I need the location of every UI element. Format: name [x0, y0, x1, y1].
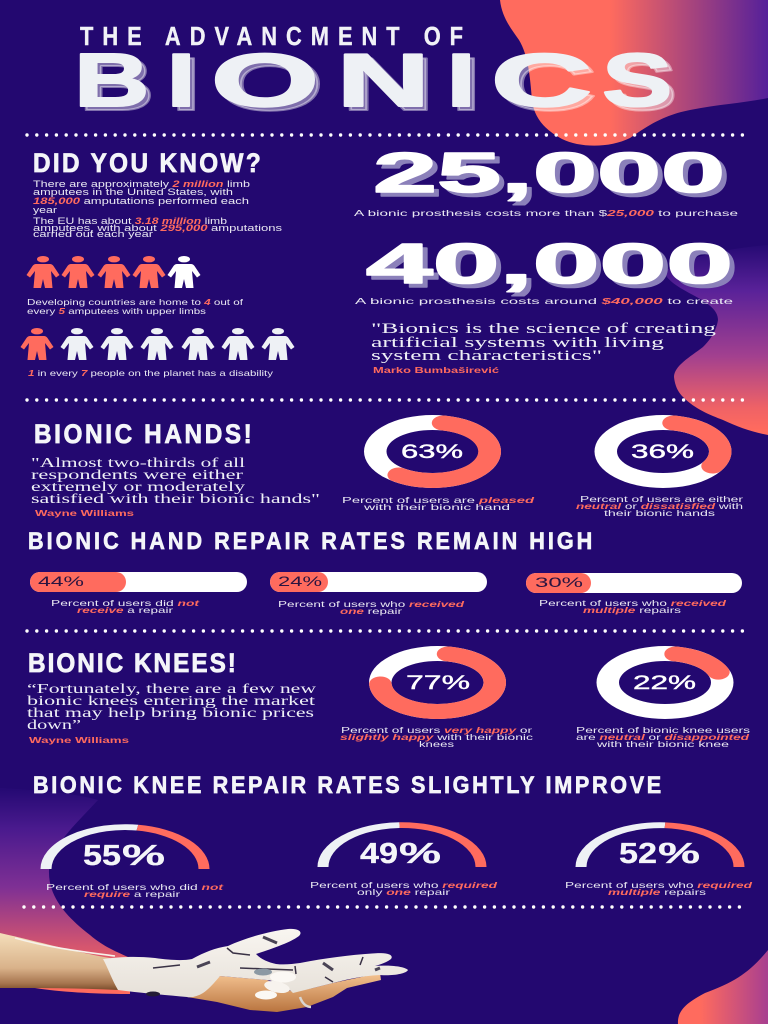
- heading: knee repair rates: BIONIC KNEE REPAIR RATES SLIGHTLY IMPROVE: [33, 771, 661, 798]
- caption: pleased: Percent of users are pleased: [342, 495, 536, 505]
- background blob: bottom right: [678, 950, 768, 1024]
- quote: wayne williams on knees: bionic knees entering the market: [27, 694, 315, 709]
- panel: did you know: [20, 149, 294, 378]
- gauge: 52%: %: [658, 838, 700, 870]
- text block: amputee statistics: amputees, with about 295,000 amputations: [33, 223, 283, 233]
- background blob: bottom left: [0, 788, 130, 994]
- text block: amputee statistics: amputees in the United States, with: [33, 187, 233, 197]
- donut chart: 77%: [369, 646, 506, 719]
- title: bionics: I: [172, 42, 201, 126]
- title: bionics: B: [79, 42, 154, 126]
- gauge: 52%: [581, 825, 739, 870]
- caption: neutral or dissatisfied: Percent of users are either: [580, 494, 743, 504]
- title: bionics: C: [496, 42, 597, 126]
- icons: 1 of 7 people: [20, 328, 294, 360]
- caption: cost to purchase: A bionic prosthesis costs more than $ 25,000 to purchase: [354, 208, 739, 218]
- caption: very happy: Percent of users very happy or: [341, 725, 532, 735]
- donut chart: 63%: 63%: [401, 442, 463, 463]
- gauge: 49%: [323, 825, 481, 870]
- caption: disability: 1 in every 7 people on the planet has a disability: [28, 368, 274, 378]
- quote: wayne williams on knees: down”: [27, 718, 81, 733]
- caption: one repair required: [310, 880, 499, 897]
- title: bionics: [74, 38, 677, 126]
- caption: neutral or dissatisfied: [576, 494, 744, 518]
- panel: hand repair rates: [28, 527, 742, 616]
- stat: 25,000: 25,000: [378, 145, 730, 209]
- background blob: top right: [500, 0, 768, 146]
- gauge: 52%: 52: [619, 838, 657, 870]
- title: bionics: C: [491, 38, 592, 122]
- caption: neutral or disappointed: [576, 725, 751, 749]
- quote: wayne williams on knees: “Fortunately, there are a few new: [27, 682, 317, 697]
- quote: wayne williams on knees: Wayne Williams: [29, 735, 130, 745]
- title: bionics: S: [607, 42, 677, 126]
- heading: did you know: DID YOU KNOW?: [33, 149, 261, 178]
- caption: neutral or disappointed: Percent of bionic knee users: [576, 725, 750, 735]
- gauge: 55%: [46, 827, 204, 872]
- quote: definition of bionics: [371, 321, 716, 375]
- title: bionics: N: [342, 42, 435, 126]
- panel: knee repair rates: [33, 771, 754, 899]
- title: bionics: I: [447, 38, 476, 122]
- text block: amputee statistics: [33, 179, 283, 239]
- caption: neutral or disappointed: are neutral or disappointed: [576, 732, 751, 742]
- donut chart: 22%: 22%: [633, 673, 696, 694]
- title: bionics: S: [602, 38, 672, 122]
- caption: one repair: one repair: [340, 606, 402, 616]
- quote: wayne williams on hands: "Almost two-thirds of all: [31, 456, 245, 471]
- title: bionics: O: [211, 38, 319, 122]
- caption: neutral or dissatisfied: neutral or dissatisfied with: [576, 501, 744, 511]
- text block: amputee statistics: 185,000 amputations performed each: [33, 196, 249, 206]
- caption: pleased: with their bionic hand: [362, 502, 511, 512]
- gauge: 49%: 49: [360, 838, 398, 870]
- quote: wayne williams on hands: extremely or moderately: [31, 480, 245, 495]
- donut chart: 77%: 77%: [406, 673, 470, 694]
- icons: 4 of 5 people: [26, 256, 200, 288]
- quote: definition of bionics: system characteristics": [371, 348, 602, 364]
- caption: pleased: [342, 495, 536, 512]
- icon: bionic hand: [0, 929, 408, 1012]
- caption: developing countries: [27, 297, 244, 316]
- caption: developing countries: Developing countries are home to 4 out of: [27, 297, 244, 307]
- caption: multiple repairs: multiple repairs: [583, 605, 681, 615]
- caption: neutral or disappointed: with their bionic knee: [595, 739, 730, 749]
- donut chart: 36%: 36%: [631, 442, 694, 463]
- title: bionics: N: [337, 38, 430, 122]
- quote: wayne williams on hands: Wayne Williams: [35, 508, 135, 518]
- title: bionics: I: [452, 42, 481, 126]
- caption: one repair required: Percent of users who required: [310, 880, 499, 890]
- title: bionics: I: [167, 38, 196, 122]
- text block: amputee statistics: The EU has about 3.18 million limb: [33, 216, 227, 226]
- caption: no repair required: Percent of users who did not: [46, 882, 225, 892]
- quote: wayne williams on hands: [31, 456, 320, 518]
- caption: multiple repairs: [539, 598, 728, 615]
- stat: 40,000: 40,000: [371, 236, 738, 300]
- stat: 40,000: 40,000: [366, 232, 733, 296]
- caption: no repair: receive a repair: [77, 605, 173, 615]
- progress bar: 24%: 24%: [278, 573, 322, 589]
- caption: neutral or dissatisfied: their bionic hands: [604, 508, 715, 518]
- caption: one repair: Percent of users who received: [278, 599, 465, 609]
- panel: bionic hands: [31, 415, 744, 518]
- heading: bionic hands: BIONIC HANDS!: [34, 420, 252, 449]
- caption: multiple repairs required: [565, 880, 754, 897]
- donut chart: 36%: [594, 415, 732, 488]
- caption: one repair: [278, 599, 465, 616]
- donut chart: 63%: [364, 415, 501, 488]
- progress bar: 44%: 44%: [38, 573, 84, 589]
- panel: bionic knees: [27, 646, 751, 749]
- title: bionics: B: [74, 38, 149, 122]
- gauge: 55%: %: [122, 840, 165, 872]
- quote: definition of bionics: Marko Bumbaširević: [373, 365, 500, 375]
- progress bar: 30%: [526, 573, 742, 593]
- quote: wayne williams on knees: that may help bring bionic prices: [27, 706, 314, 721]
- title: the advancment of: THE ADVANCMENT OF: [80, 22, 463, 51]
- gauge: 55%: 55: [83, 840, 121, 872]
- stat: 25,000: [373, 141, 730, 209]
- gauge: 49%: %: [399, 838, 441, 870]
- quote: wayne williams on hands: satisfied with their bionic hands": [31, 492, 320, 507]
- heading: bionic knees: BIONIC KNEES!: [28, 649, 236, 678]
- caption: no repair: [51, 598, 201, 615]
- progress bar: 30%: 30%: [535, 574, 583, 590]
- quote: definition of bionics: artificial systems with living: [371, 335, 664, 351]
- caption: very happy: slightly happy with their bionic: [340, 732, 533, 742]
- title: bionics: O: [216, 42, 324, 126]
- text block: amputee statistics: year: [33, 205, 57, 215]
- caption: cost to create: A bionic prosthesis costs around $40,000 to create: [355, 296, 734, 306]
- caption: developing countries: every 5 amputees with upper limbs: [27, 306, 206, 316]
- stat: 25,000: 25,000: [373, 141, 725, 205]
- panel: costs: [354, 141, 739, 375]
- quote: wayne williams on hands: respondents were either: [31, 468, 244, 483]
- donut chart: 22%: [596, 646, 734, 719]
- progress bar: 44%: [30, 572, 247, 592]
- caption: no repair required: [46, 882, 225, 899]
- text block: amputee statistics: carried out each year: [33, 229, 153, 239]
- quote: wayne williams on knees: [27, 682, 317, 745]
- caption: very happy: [340, 725, 533, 749]
- caption: multiple repairs required: Percent of users who required: [565, 880, 754, 890]
- caption: multiple repairs: Percent of users who received: [539, 598, 728, 608]
- progress bar: 24%: [270, 572, 487, 592]
- caption: very happy: knees: [419, 739, 454, 749]
- caption: no repair: Percent of users did not: [51, 598, 201, 608]
- background blob: right middle: [664, 245, 768, 435]
- caption: no repair required: require a repair: [84, 889, 180, 899]
- caption: multiple repairs required: multiple repairs: [608, 887, 706, 897]
- caption: one repair required: only one repair: [357, 887, 450, 897]
- stat: 40,000: [366, 232, 738, 300]
- text block: amputee statistics: There are approximately 2 million limb: [33, 179, 250, 189]
- quote: definition of bionics: "Bionics is the science of creating: [371, 321, 716, 337]
- heading: hand repair rates: BIONIC HAND REPAIR RATES REMAIN HIGH: [28, 527, 592, 554]
